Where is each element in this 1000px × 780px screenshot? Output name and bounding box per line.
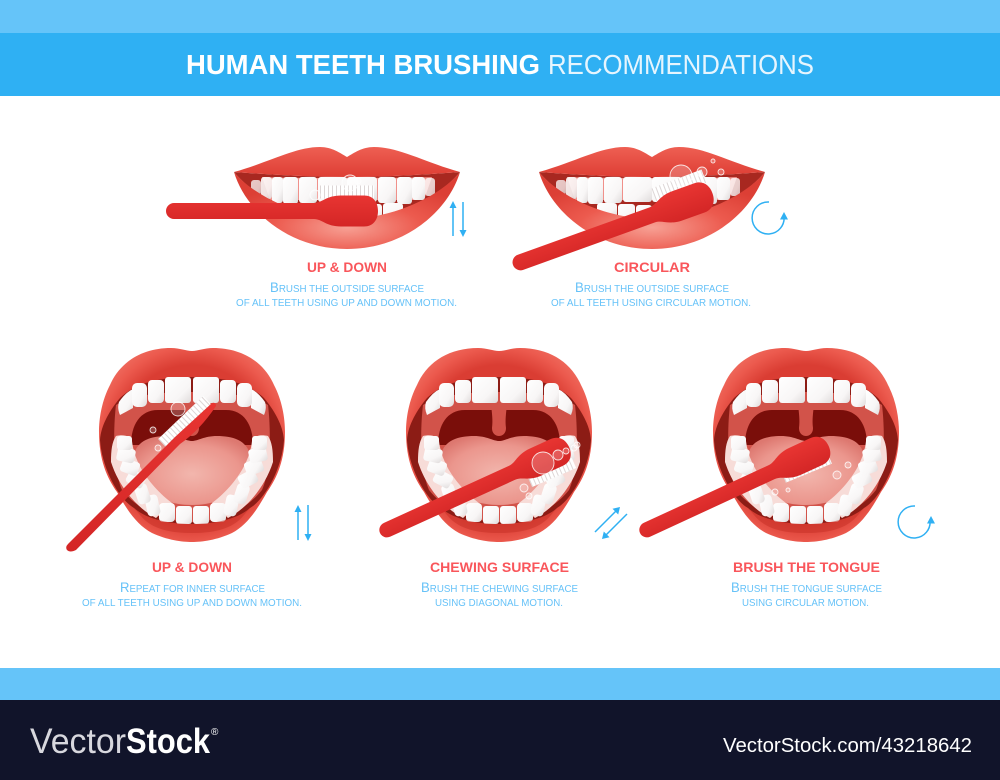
icon: circular arrow	[752, 202, 788, 234]
logo: VectorStock: ®	[211, 727, 219, 738]
description	[421, 580, 578, 609]
bristles and foam	[654, 159, 724, 195]
description	[731, 580, 882, 609]
description: OF ALL TEETH USING UP AND DOWN MOTION.	[82, 598, 302, 609]
illustration: open mouth	[713, 348, 899, 542]
description: BRUSH THE OUTSIDE SURFACE	[575, 280, 729, 295]
title: RECOMMENDATIONS	[548, 49, 814, 80]
header band: title bar	[0, 33, 1000, 96]
description: OF ALL TEETH USING UP AND DOWN MOTION.	[236, 298, 457, 309]
toothbrush diagonal	[508, 179, 718, 280]
heading: up and down: UP & DOWN	[307, 259, 387, 275]
description: BRUSH THE CHEWING SURFACE	[421, 580, 578, 595]
description	[236, 280, 457, 309]
description: USING DIAGONAL MOTION.	[435, 598, 563, 609]
stock image id: VectorStock.com/43218642	[723, 735, 972, 757]
illustration: open mouth	[99, 348, 285, 542]
title: HUMAN TEETH BRUSHING	[186, 49, 540, 80]
footer band: dark bar	[0, 700, 1000, 780]
illustration: closed mouth with teeth	[234, 147, 460, 249]
heading: chewing surface: CHEWING SURFACE	[430, 559, 569, 575]
illustration: open mouth	[406, 348, 592, 542]
icon: up and down arrows	[450, 201, 466, 237]
panel: brush the tongue	[634, 348, 935, 609]
icon: up and down arrows	[294, 505, 312, 541]
panel: up and down inner surface	[66, 348, 312, 609]
footer band: light strip	[0, 668, 1000, 700]
panel: up and down outer surface	[166, 147, 466, 309]
toothbrush horizontal	[166, 196, 378, 226]
description: BRUSH THE TONGUE SURFACE	[731, 580, 882, 595]
logo: VectorStock: Stock	[126, 722, 210, 761]
description: REPEAT FOR INNER SURFACE	[120, 580, 265, 595]
bristles and foam	[520, 445, 577, 499]
logo: VectorStock: Vector	[30, 722, 126, 761]
description	[551, 280, 751, 309]
toothbrush diagonal	[374, 433, 575, 546]
heading: up and down: UP & DOWN	[152, 559, 232, 575]
bristles and foam	[310, 175, 374, 200]
foam over brush	[532, 442, 580, 474]
panel: chewing surface	[374, 348, 627, 609]
icon: circular arrow	[898, 506, 935, 538]
toothbrush steep with bristles	[66, 401, 216, 552]
illustration: closed mouth with teeth	[539, 147, 765, 249]
header band: light top strip	[0, 0, 1000, 33]
description: OF ALL TEETH USING CIRCULAR MOTION.	[551, 298, 751, 309]
description: USING CIRCULAR MOTION.	[742, 598, 869, 609]
description: BRUSH THE OUTSIDE SURFACE	[270, 280, 424, 295]
toothbrush on tongue	[634, 432, 835, 546]
description	[82, 580, 302, 609]
heading: brush the tongue: BRUSH THE TONGUE	[733, 559, 880, 575]
icon: diagonal arrows	[595, 507, 627, 539]
panel: circular	[508, 147, 788, 309]
bristles and foam	[772, 459, 851, 495]
heading: circular: CIRCULAR	[614, 259, 690, 275]
